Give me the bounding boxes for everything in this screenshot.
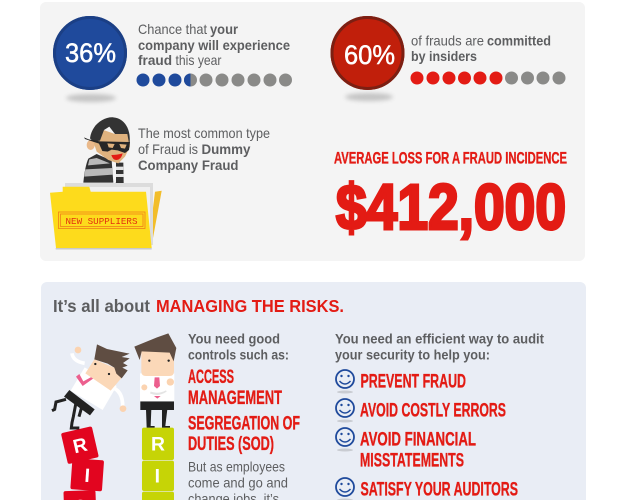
text: insiders: by insiders xyxy=(411,48,477,64)
dot scale: 6 of 10 xyxy=(410,72,566,84)
red block: S xyxy=(63,490,97,500)
stat badge: 60% xyxy=(330,16,404,101)
text: chance of fraud: your xyxy=(210,21,239,37)
illustration: standing man on green blocks xyxy=(134,333,176,500)
text: most common fraud type: The most common type xyxy=(138,125,270,141)
icon: smiley xyxy=(336,370,354,394)
item: avoid financial misstatements: MISSTATEMENTS xyxy=(360,451,464,472)
heading: managing the risks: MANAGING THE RISKS. xyxy=(156,296,344,316)
heading: managing the risks: It’s all about xyxy=(53,296,150,316)
text: chance of fraud: fraud xyxy=(138,52,172,68)
icon: folder xyxy=(50,183,162,250)
list: controls: MANAGEMENT xyxy=(188,388,282,409)
stat badge: 60%: 60% xyxy=(344,40,395,70)
text: employees change: come and go and xyxy=(188,474,288,490)
red block: I xyxy=(70,458,104,491)
red block: R xyxy=(61,426,99,464)
text: good controls xyxy=(188,330,289,362)
text: most common fraud type: Company Fraud xyxy=(138,157,238,173)
text: most common fraud type xyxy=(138,125,270,173)
icon: smiley xyxy=(336,428,354,452)
green block: I xyxy=(142,461,174,491)
list: controls: DUTIES (SOD) xyxy=(188,434,274,455)
panel: managing the risks xyxy=(41,282,586,500)
text: employees change: But as employees xyxy=(188,458,285,474)
panel: fraud statistics xyxy=(40,2,585,261)
item: avoid financial misstatements: AVOID FINANCIAL xyxy=(360,430,476,451)
text: good controls: You need good xyxy=(188,330,280,346)
green block: R: R xyxy=(151,435,165,456)
text: efficient audit: You need an efficient way to audit xyxy=(335,330,544,346)
text: efficient audit xyxy=(335,330,544,362)
red block: I: I xyxy=(84,466,91,487)
heading: managing the risks xyxy=(53,296,344,316)
text: insiders: of frauds are xyxy=(411,32,484,48)
list: controls xyxy=(188,367,300,455)
text: chance of fraud: Chance that xyxy=(138,21,207,37)
item: avoid costly errors: AVOID COSTLY ERRORS xyxy=(360,401,506,422)
text: chance of fraud xyxy=(138,21,290,68)
list: audit benefits xyxy=(336,370,518,500)
text: efficient audit: your security to help you: xyxy=(335,346,490,362)
label: new suppliers stamp: NEW SUPPLIERS xyxy=(66,216,138,227)
item: avoid financial misstatements xyxy=(360,430,476,472)
red block: R: R xyxy=(71,435,90,458)
text: most common fraud type: of Fraud is xyxy=(138,141,198,157)
green block: I: I xyxy=(155,467,160,488)
icon: smiley xyxy=(336,478,354,500)
illustration: falling man on red blocks xyxy=(52,344,130,500)
text: chance of fraud: this year xyxy=(176,52,222,68)
text: good controls: controls such as: xyxy=(188,346,289,362)
stat badge: 36%: 36% xyxy=(65,38,116,68)
green block: R xyxy=(142,428,174,460)
list: controls: SEGREGATION OF xyxy=(188,414,300,434)
stat badge: 36% xyxy=(53,16,127,102)
text: insiders xyxy=(411,32,551,64)
icon: smiley xyxy=(336,399,354,422)
item: prevent fraud: PREVENT FRAUD xyxy=(360,372,466,393)
text: employees change xyxy=(188,458,288,500)
text: insiders: committed xyxy=(487,32,551,48)
dot scale: 3.6 of 10 xyxy=(136,74,292,86)
green block: S xyxy=(142,492,174,500)
text: most common fraud type: Dummy xyxy=(202,141,251,157)
icon: thief xyxy=(83,117,130,191)
text: chance of fraud: company will experience xyxy=(138,37,290,53)
list: controls: ACCESS xyxy=(188,367,234,388)
figure: $412,000: $412,000 xyxy=(336,171,566,243)
